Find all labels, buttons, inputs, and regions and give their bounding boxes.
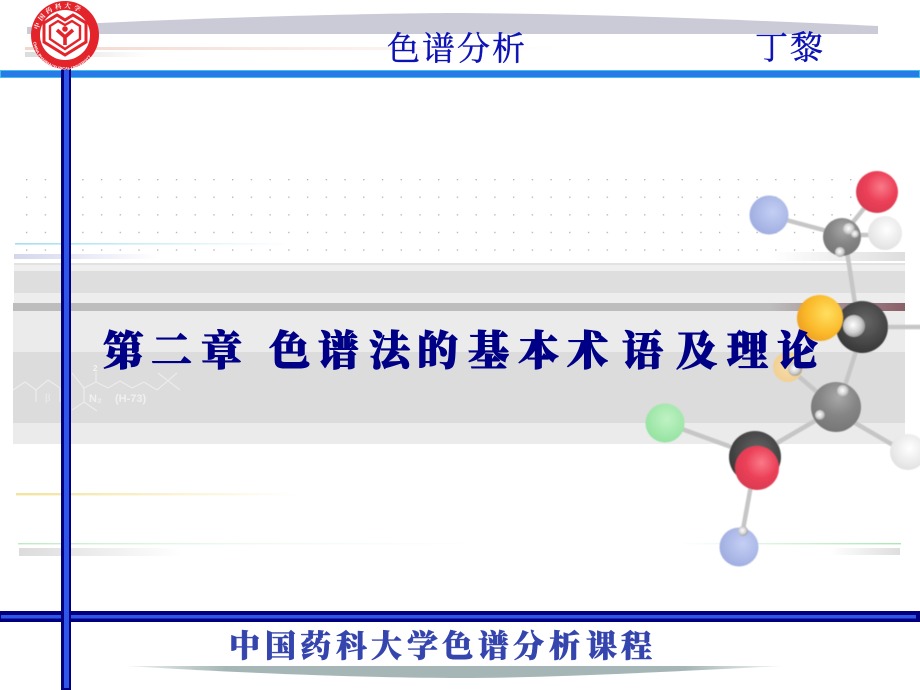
atom: white upper [868,216,902,250]
atom: black carbon [836,301,888,353]
footer swoosh [127,666,785,678]
main chapter title: 第二章色谱法的基本术语及理论 [103,328,818,374]
dot grid [26,179,861,251]
faint chemical structure watermark: N₂ [89,393,102,405]
atom: blue upper [750,196,788,234]
atom: red lower [735,446,779,490]
joint on lower blue atom [738,526,748,536]
seal lower inscription: CHINA PHARMACEUTICAL UNIVERSITY [33,42,90,70]
atom: dark lower carbon [729,431,781,483]
faint chemical structure watermark: β [45,392,51,404]
joint on black carbon [843,315,865,337]
joint on orange atom [788,362,802,376]
seal emblem [44,15,86,55]
atom: blue lower [720,528,758,566]
header author name: 丁黎 [755,30,823,67]
atom: white right [890,434,920,470]
logo: university seal [31,1,99,70]
faint chemical structure watermark: (H-73) [115,393,147,405]
header title: course name: 色谱分析 [387,31,525,68]
header decoration: swoosh and fading lines [25,13,878,57]
faint chemical structure watermark: 2 [93,364,98,373]
seal disc [31,1,99,69]
footer rule [0,611,920,622]
atom: faded orange [773,352,803,382]
atom: red upper [856,171,898,213]
seal upper inscription: 中国药科大学 [34,2,81,29]
vertical rule [61,69,71,690]
joints on upper carbon [835,223,859,257]
molecule illustration [646,171,920,566]
title band: layered gray stripes [13,263,905,444]
footer title: 中国药科大学色谱分析课程 [229,629,652,664]
molecule bonds [668,196,920,535]
seal inner field [40,10,90,60]
atom: yellow [797,295,843,341]
joints on middle carbon [815,385,849,420]
header rule [0,70,920,78]
atom: gray upper carbon [823,218,861,256]
seal emblem head [62,26,68,32]
faint chemical structure watermark [13,364,180,411]
atom: gray middle carbon [811,382,861,432]
accent lines above the title band [14,243,905,261]
atom: green [646,404,684,442]
accent lines below the title band [16,493,901,556]
